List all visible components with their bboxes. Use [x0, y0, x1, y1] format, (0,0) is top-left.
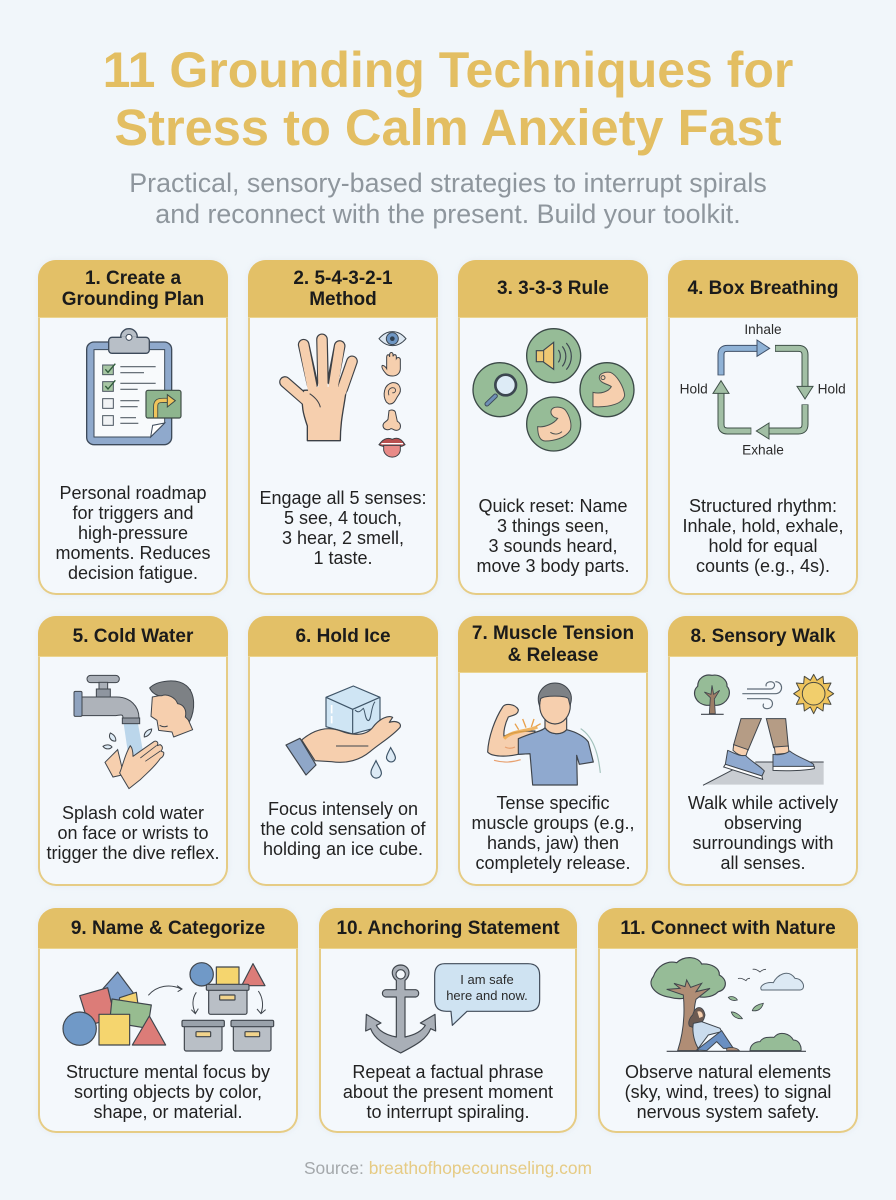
description: (sky, wind, trees) to signal	[625, 1082, 831, 1102]
description: hands, jaw) then	[487, 833, 619, 853]
heading	[38, 260, 228, 318]
description: muscle groups (e.g.,	[471, 813, 635, 833]
heading: 1. Create a	[85, 268, 181, 289]
description	[46, 803, 220, 863]
heading: 3. 3-3-3 Rule	[497, 278, 609, 299]
subtitle: Practical, sensory-based strategies to interrupt spirals	[129, 168, 767, 198]
title: Stress to Calm Anxiety Fast	[114, 99, 782, 156]
heading	[248, 616, 438, 657]
description: shape, or material.	[93, 1102, 243, 1122]
description: Splash cold water	[62, 803, 204, 823]
diagram: box breathing cycle: Hold	[818, 381, 846, 396]
heading	[668, 616, 858, 657]
description: the cold sensation of	[260, 819, 426, 839]
heading	[319, 908, 577, 949]
description: move 3 body parts.	[476, 556, 630, 576]
icon: hand holding ice cube	[285, 685, 401, 779]
subtitle: and reconnect with the present. Build your toolkit.	[155, 199, 741, 229]
description: about the present moment	[343, 1082, 553, 1102]
description: Tense specific	[496, 793, 610, 813]
heading: Method	[309, 289, 377, 310]
panel: 10. Anchoring Statement	[319, 908, 577, 1133]
panel: 6. Hold Ice	[248, 616, 438, 886]
description	[625, 1062, 831, 1122]
description: 1 taste.	[313, 548, 373, 568]
description	[343, 1062, 553, 1122]
heading: & Release	[508, 645, 598, 666]
description	[476, 496, 630, 576]
description	[259, 488, 427, 568]
description: to interrupt spiraling.	[366, 1102, 530, 1122]
icon: hand and five senses	[279, 331, 407, 458]
description: high-pressure	[78, 523, 188, 543]
description: holding an ice cube.	[263, 839, 423, 859]
icon: walking with tree, wind and sun	[694, 674, 834, 786]
heading	[38, 616, 228, 657]
title: 11 Grounding Techniques for	[103, 42, 793, 98]
panel: 5. Cold Water	[38, 616, 228, 886]
description: moments. Reduces	[55, 543, 211, 563]
description	[55, 483, 211, 583]
heading: 6. Hold Ice	[295, 626, 391, 647]
icon: sorting shapes into boxes	[62, 962, 274, 1052]
panel: 4. Box Breathing	[668, 260, 858, 595]
description: Inhale, hold, exhale,	[682, 516, 844, 536]
description: on face or wrists to	[57, 823, 209, 843]
panel: 2. 5-4-3-2-1 Method	[248, 260, 438, 595]
description	[688, 793, 838, 873]
panel: 1. Create a Grounding Plan	[38, 260, 228, 595]
diagram: box breathing cycle: Exhale	[742, 442, 784, 457]
subtitle	[129, 168, 767, 229]
heading: 4. Box Breathing	[688, 278, 838, 299]
description: Walk while actively	[688, 793, 838, 813]
description: Structure mental focus by	[66, 1062, 270, 1082]
description: Quick reset: Name	[478, 496, 628, 516]
description: Personal roadmap	[59, 483, 207, 503]
panel: 3. 3-3-3 Rule	[458, 260, 648, 595]
description: 3 hear, 2 smell,	[282, 528, 404, 548]
icon: anchor and speech bubble: here and now.	[447, 988, 528, 1003]
icon: anchor and speech bubble: I am safe	[461, 972, 514, 987]
description	[66, 1062, 270, 1122]
description: completely release.	[475, 853, 631, 873]
heading: 9. Name & Categorize	[71, 918, 265, 939]
heading: 8. Sensory Walk	[690, 626, 836, 647]
description: Structured rhythm:	[689, 496, 837, 516]
description: for triggers and	[72, 503, 194, 523]
panel: 11. Connect with Nature	[598, 908, 858, 1133]
heading: 11. Connect with Nature	[620, 918, 836, 939]
description: 3 things seen,	[497, 516, 609, 536]
heading: 7. Muscle Tension	[472, 623, 634, 644]
description: observing	[724, 813, 802, 833]
heading: 10. Anchoring Statement	[336, 918, 560, 939]
description: surroundings with	[692, 833, 834, 853]
description: nervous system safety.	[637, 1102, 819, 1122]
heading	[458, 616, 648, 673]
description: counts (e.g., 4s).	[696, 556, 830, 576]
diagram: box breathing cycle	[680, 322, 846, 457]
heading	[38, 908, 298, 949]
diagram: box breathing cycle: Hold	[680, 381, 708, 396]
description: Observe natural elements	[625, 1062, 831, 1082]
icon: see, hear and move circles	[472, 328, 635, 452]
description	[682, 496, 844, 576]
description: sorting objects by color,	[74, 1082, 262, 1102]
heading	[458, 260, 648, 318]
heading	[668, 260, 858, 318]
icon: anchor and speech bubble	[365, 963, 540, 1054]
description: 5 see, 4 touch,	[284, 508, 402, 528]
heading: 2. 5-4-3-2-1	[293, 268, 393, 289]
heading: 5. Cold Water	[73, 626, 193, 647]
description: decision fatigue.	[68, 563, 198, 583]
icon: person resting under tree	[650, 957, 806, 1052]
panel: 9. Name & Categorize	[38, 908, 298, 1133]
icon: faucet, face and hands	[74, 674, 194, 790]
description: hold for equal	[708, 536, 818, 556]
heading	[598, 908, 858, 949]
icon: man flexing arm	[487, 682, 601, 786]
heading: Grounding Plan	[62, 289, 204, 310]
source line: Source: breathofhopecounseling.com	[304, 1158, 592, 1178]
panel: 8. Sensory Walk	[668, 616, 858, 886]
title	[103, 42, 793, 156]
diagram: box breathing cycle: Inhale	[745, 322, 782, 337]
description: Focus intensely on	[268, 799, 418, 819]
description: Repeat a factual phrase	[352, 1062, 544, 1082]
panel: 7. Muscle Tension & Release	[458, 616, 648, 886]
description: all senses.	[720, 853, 806, 873]
description	[471, 793, 635, 873]
description: trigger the dive reflex.	[46, 843, 220, 863]
description: Engage all 5 senses:	[259, 488, 427, 508]
heading	[248, 260, 438, 318]
icon: clipboard checklist	[86, 328, 182, 446]
description: 3 sounds heard,	[488, 536, 618, 556]
description	[260, 799, 426, 859]
